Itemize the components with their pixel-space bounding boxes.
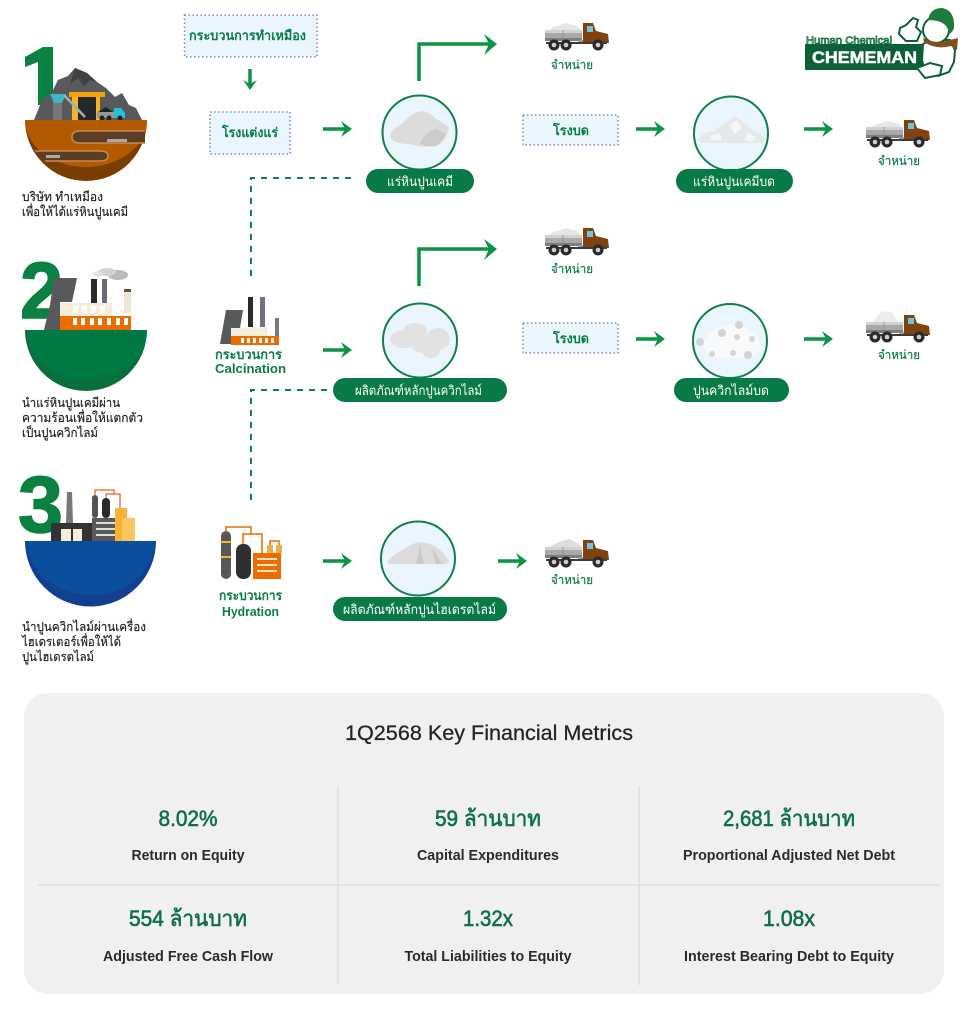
label pill [674, 378, 789, 402]
icon: hydration plant [221, 527, 282, 579]
box: grinding plant 2 [523, 323, 618, 353]
arrow: to ground quicklime [636, 331, 665, 347]
metric: capex [417, 806, 559, 864]
metric: debt to equity: Interest Bearing Debt to Equity [684, 948, 895, 965]
box: mining process: กระบวนการทำเหมือง [189, 28, 306, 43]
icon: calcination plant [220, 297, 279, 345]
rock [390, 111, 449, 147]
mine truck [97, 107, 125, 120]
arrow: to ground limestone [636, 121, 665, 137]
step 3 caption [21, 618, 146, 665]
metric: ROE [132, 806, 245, 864]
label pill [333, 378, 507, 402]
logo: Chememan: CHEMEMAN [812, 48, 917, 67]
box: mining process [184, 15, 317, 57]
truck: row 2 right [866, 311, 930, 362]
truck: row 2 top [545, 228, 609, 276]
mascot open hand [917, 63, 942, 78]
elbow arrow: row 1 sale [419, 34, 497, 81]
step 1 caption [22, 190, 128, 220]
truck: row 2 top: จำหน่าย [551, 262, 593, 276]
node: quicklime: ผลิตภัณฑ์หลักปูนควิกไลม์ [355, 383, 482, 399]
panel title: 1Q2568 Key Financial Metrics [345, 722, 633, 745]
dark building [51, 523, 92, 541]
truck: row 1 top [545, 23, 609, 72]
powder cone [387, 542, 449, 564]
node: ground quicklime [674, 304, 789, 402]
cream block [60, 303, 112, 316]
node: ground quicklime: ปูนควิกไลม์บด [693, 383, 769, 399]
orange block [60, 316, 131, 330]
metric: ROE: 8.02% [158, 806, 218, 831]
node: ground limestone [676, 96, 793, 193]
number 2: 2 [20, 246, 63, 335]
metric: net debt: Proportional Adjusted Net Debt [683, 847, 895, 864]
cooling tower [44, 278, 77, 330]
arrow: to sale row 2 [804, 331, 833, 347]
label pill [366, 169, 474, 193]
lumps [390, 323, 450, 358]
step 2 caption: ความร้อนเพื่อให้แตกตัว [22, 409, 143, 425]
step 2 caption: เป็นปูนควิกไลม์ [22, 425, 98, 441]
stack [66, 492, 73, 523]
node: hydrated lime: ผลิตภัณฑ์หลักปูนไฮเดรตไลม์ [343, 602, 496, 618]
powder pile [698, 116, 765, 143]
logo band [805, 44, 925, 70]
mascot [899, 8, 958, 78]
node: limestone: แร่หินปูนเคมี [387, 174, 453, 190]
truck: row 1 right [866, 120, 930, 168]
panel: key financial metrics [24, 693, 944, 994]
step 2: calcination illustration [20, 246, 147, 391]
label pill [333, 597, 507, 621]
metric: capex: 59 ล้านบาท [435, 806, 541, 831]
box: grinding plant 1 [523, 115, 618, 145]
crushed pile [696, 321, 762, 359]
conveyor tower [50, 94, 85, 120]
truck: row 1 right: จำหน่าย [878, 154, 920, 168]
node: quicklime [333, 304, 507, 402]
truck: row 2 right: จำหน่าย [878, 348, 920, 362]
label: hydration [219, 588, 282, 619]
smoke [93, 268, 128, 280]
tunnels [35, 131, 145, 161]
box: grinding plant 2: โรงบด [552, 330, 589, 346]
arrow: to quicklime [323, 342, 352, 358]
step 3: hydration illustration [18, 460, 156, 606]
logo: Chememan [805, 8, 958, 78]
label: calcination [215, 347, 286, 376]
step 1: mining illustration [25, 47, 147, 181]
mountain [34, 68, 142, 120]
step 1 caption: เพื่อให้ได้แร่หินปูนเคมี [22, 203, 128, 220]
gray building [92, 518, 120, 541]
arrow: to limestone [323, 121, 352, 137]
chimneys [91, 279, 131, 313]
dashed link: quicklime to hydration [251, 390, 335, 500]
mascot thumb hand [899, 18, 921, 41]
truck: row 1 top: จำหน่าย [551, 58, 593, 72]
label: hydration: Hydration [222, 604, 279, 619]
arrow: down [243, 69, 257, 90]
metric: net debt: 2,681 ล้านบาท [723, 806, 855, 831]
number 3: 3 [18, 460, 63, 549]
node: limestone [366, 96, 474, 193]
metric: free cash flow: Adjusted Free Cash Flow [103, 948, 273, 965]
metric: capex: Capital Expenditures [417, 847, 559, 864]
yellow buildings [115, 508, 135, 541]
arrow: to sale row 1 [804, 121, 833, 137]
metric: free cash flow [103, 906, 273, 965]
metric: liabilities to equity: 1.32x [463, 906, 513, 931]
label pill [676, 169, 793, 193]
step 3 caption: ไฮเดรเตอร์เพื่อให้ได้ [21, 633, 121, 649]
metric: debt to equity: 1.08x [763, 906, 815, 931]
step 3 caption: ปูนไฮเดรตไลม์ [22, 650, 94, 665]
truck: row 3: จำหน่าย [551, 573, 593, 587]
brown ground bowl [25, 120, 147, 181]
node: ground limestone: แร่หินปูนเคมีบด [693, 174, 775, 190]
mascot helmet [928, 8, 954, 34]
box: ore dressing plant: โรงแต่งแร่ [221, 124, 278, 140]
mascot head [923, 17, 949, 43]
mascot body [922, 40, 955, 76]
elbow arrow: row 2 sale [419, 239, 497, 286]
step 2 caption: นำแร่หินปูนเคมีผ่าน [22, 396, 120, 411]
node: hydrated lime [333, 522, 507, 621]
dashed link: limestone to calcination [251, 178, 355, 276]
step 1 caption: บริษัท ทำเหมือง [22, 190, 103, 204]
metric: liabilities to equity: Total Liabilities to Equity [404, 948, 572, 965]
logo tagline: Human Chemical [806, 35, 892, 47]
label: calcination: กระบวนการ [215, 347, 282, 362]
towers [92, 495, 110, 518]
metric: debt to equity [684, 906, 895, 965]
green bowl [25, 330, 147, 391]
mine building [69, 92, 105, 120]
arrow: to hydrated lime [323, 553, 352, 569]
pipes [95, 490, 120, 508]
metric: liabilities to equity [404, 906, 572, 965]
number 1 [25, 47, 53, 105]
metric: ROE: Return on Equity [132, 847, 245, 864]
label: calcination: Calcination [215, 361, 286, 376]
box: ore dressing plant [210, 112, 290, 154]
step 2 caption [22, 396, 143, 441]
blue bowl [25, 541, 156, 606]
label: hydration: กระบวนการ [219, 588, 282, 603]
step 3 caption: นำปูนควิกไลม์ผ่านเครื่อง [22, 618, 146, 635]
box: grinding plant 1: โรงบด [552, 122, 589, 138]
arrow: to sale row 3 [498, 553, 527, 569]
metric: net debt [683, 806, 895, 864]
mascot scarf [923, 38, 958, 50]
metric: free cash flow: 554 ล้านบาท [129, 906, 247, 931]
truck: row 3 [545, 539, 609, 587]
